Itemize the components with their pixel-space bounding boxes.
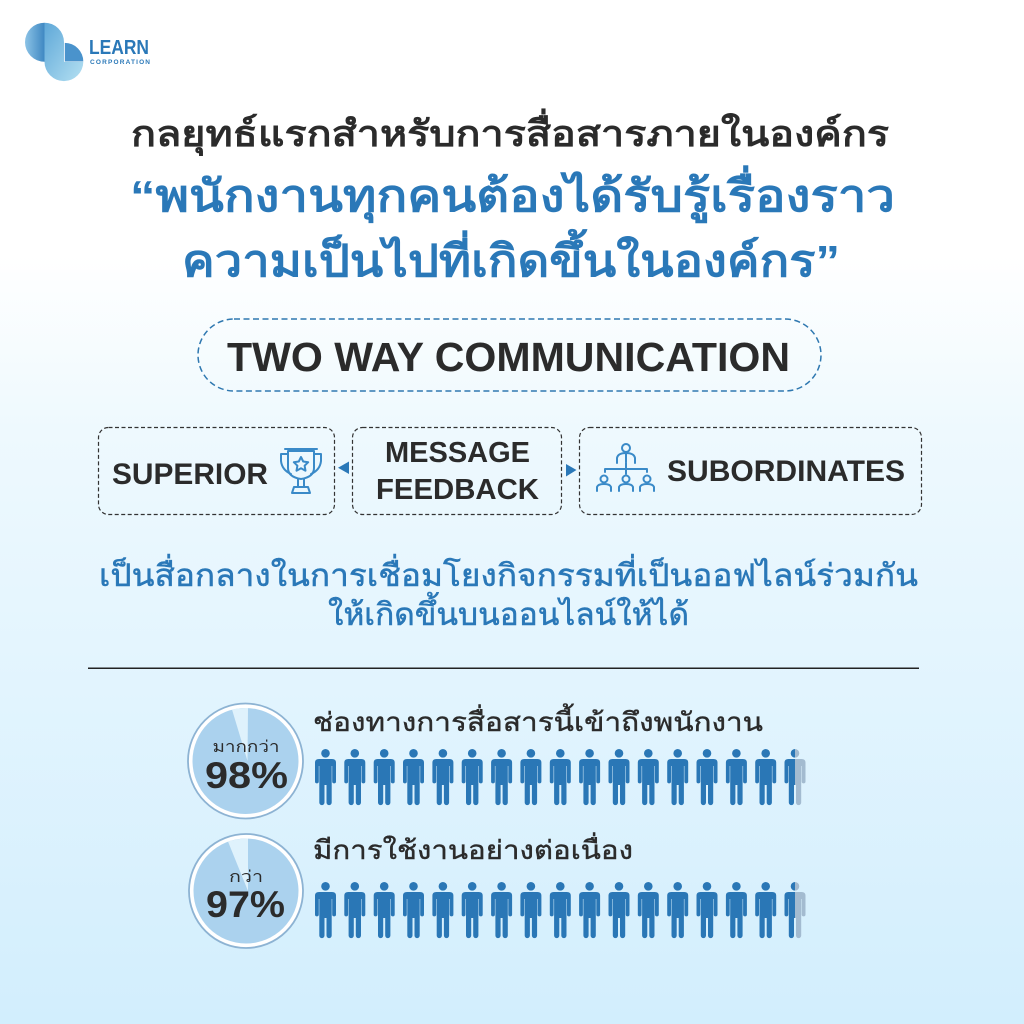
pill: two way communication: TWO WAY COMMUNICATION bbox=[227, 334, 790, 380]
arrow: right bbox=[566, 464, 576, 476]
title line 1: กลยุทธ์แรกสำหรับการสื่อสารภายในองค์กร bbox=[131, 108, 890, 157]
stat 98%: people row bbox=[315, 749, 806, 805]
stat 97%: pie badge: กว่า bbox=[229, 869, 263, 886]
icon: org chart bbox=[597, 444, 654, 491]
box: superior: SUPERIOR bbox=[112, 458, 268, 491]
subtitle text: ให้เกิดขึ้นบนออนไลน์ให้ได้ bbox=[328, 592, 689, 632]
stat 98%: heading: ช่องทางการสื่อสารนี้เข้าถึงพนักงาน bbox=[313, 703, 763, 737]
logo: Learn Corporation: CORPORATION bbox=[90, 59, 150, 66]
box: superior bbox=[98, 428, 334, 514]
subtitle text bbox=[99, 554, 918, 632]
pill: two way communication bbox=[198, 319, 821, 391]
stat 98%: pie badge: มากกว่า bbox=[212, 739, 280, 756]
box: message feedback: FEEDBACK bbox=[376, 474, 539, 506]
title quote bbox=[130, 165, 895, 286]
box: subordinates bbox=[580, 428, 922, 514]
box: subordinates: SUBORDINATES bbox=[667, 455, 905, 488]
stat 97%: pie badge: 97% bbox=[206, 884, 285, 925]
title quote: “พนักงานทุกคนต้องได้รับรู้เรื่องราว bbox=[130, 165, 895, 224]
box: message feedback bbox=[352, 428, 562, 514]
logo: Learn Corporation: LEARN bbox=[89, 37, 149, 59]
stat 97%: pie badge bbox=[189, 834, 303, 948]
stat 97%: heading: มีการใช้งานอย่างต่อเนื่อง bbox=[313, 832, 633, 865]
icon: trophy bbox=[281, 449, 321, 493]
subtitle text: เป็นสื่อกลางในการเชื่อมโยงกิจกรรมที่เป็นออฟไลน์ร่วมกัน bbox=[99, 554, 918, 593]
arrow: left bbox=[338, 462, 349, 474]
box: message feedback: MESSAGE bbox=[385, 437, 530, 469]
stat 98%: pie badge bbox=[188, 704, 303, 818]
stat 97%: people row bbox=[315, 882, 806, 938]
logo: Learn Corporation bbox=[25, 23, 150, 81]
title quote: ความเป็นไปที่เกิดขึ้นในองค์กร” bbox=[182, 228, 840, 286]
divider bbox=[88, 668, 919, 669]
stat 98%: pie badge: 98% bbox=[205, 755, 288, 796]
